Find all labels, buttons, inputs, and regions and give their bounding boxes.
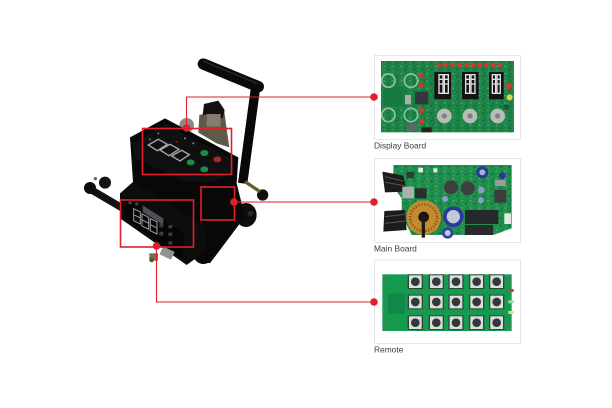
callout: remote connector — [120, 200, 378, 306]
key switch housings — [408, 274, 504, 330]
main board photo — [382, 165, 512, 239]
capacitors — [476, 166, 488, 178]
panel: remote — [374, 260, 520, 354]
toroid coil — [406, 200, 441, 235]
panel: main board — [374, 158, 520, 254]
knobs — [437, 109, 505, 123]
heat sinks — [382, 172, 407, 232]
body centre — [130, 118, 245, 263]
clamp bracket — [179, 101, 229, 147]
upper display digits — [148, 139, 189, 161]
key switches — [409, 275, 503, 329]
LEDs — [508, 289, 514, 292]
relay and parts — [465, 210, 498, 224]
upper control box — [133, 124, 235, 183]
lower display digits — [134, 209, 157, 234]
label: Display Board — [374, 140, 426, 150]
label: Remote — [374, 344, 404, 354]
machine photo — [84, 61, 268, 265]
digit displays — [434, 72, 504, 99]
callout: main board connector — [201, 187, 378, 220]
panel: display board — [374, 56, 520, 150]
display board photo — [381, 61, 514, 132]
remote board photo — [382, 274, 514, 331]
handle — [203, 61, 258, 183]
red LEDs — [418, 63, 512, 124]
lower control box — [120, 182, 205, 265]
callout: display board connector — [142, 93, 378, 174]
left arm — [84, 177, 127, 211]
label: Main Board — [374, 244, 417, 254]
bottom connector — [149, 247, 175, 262]
right wheels — [193, 182, 268, 264]
inductors — [444, 180, 458, 194]
upper buttons — [149, 132, 221, 172]
